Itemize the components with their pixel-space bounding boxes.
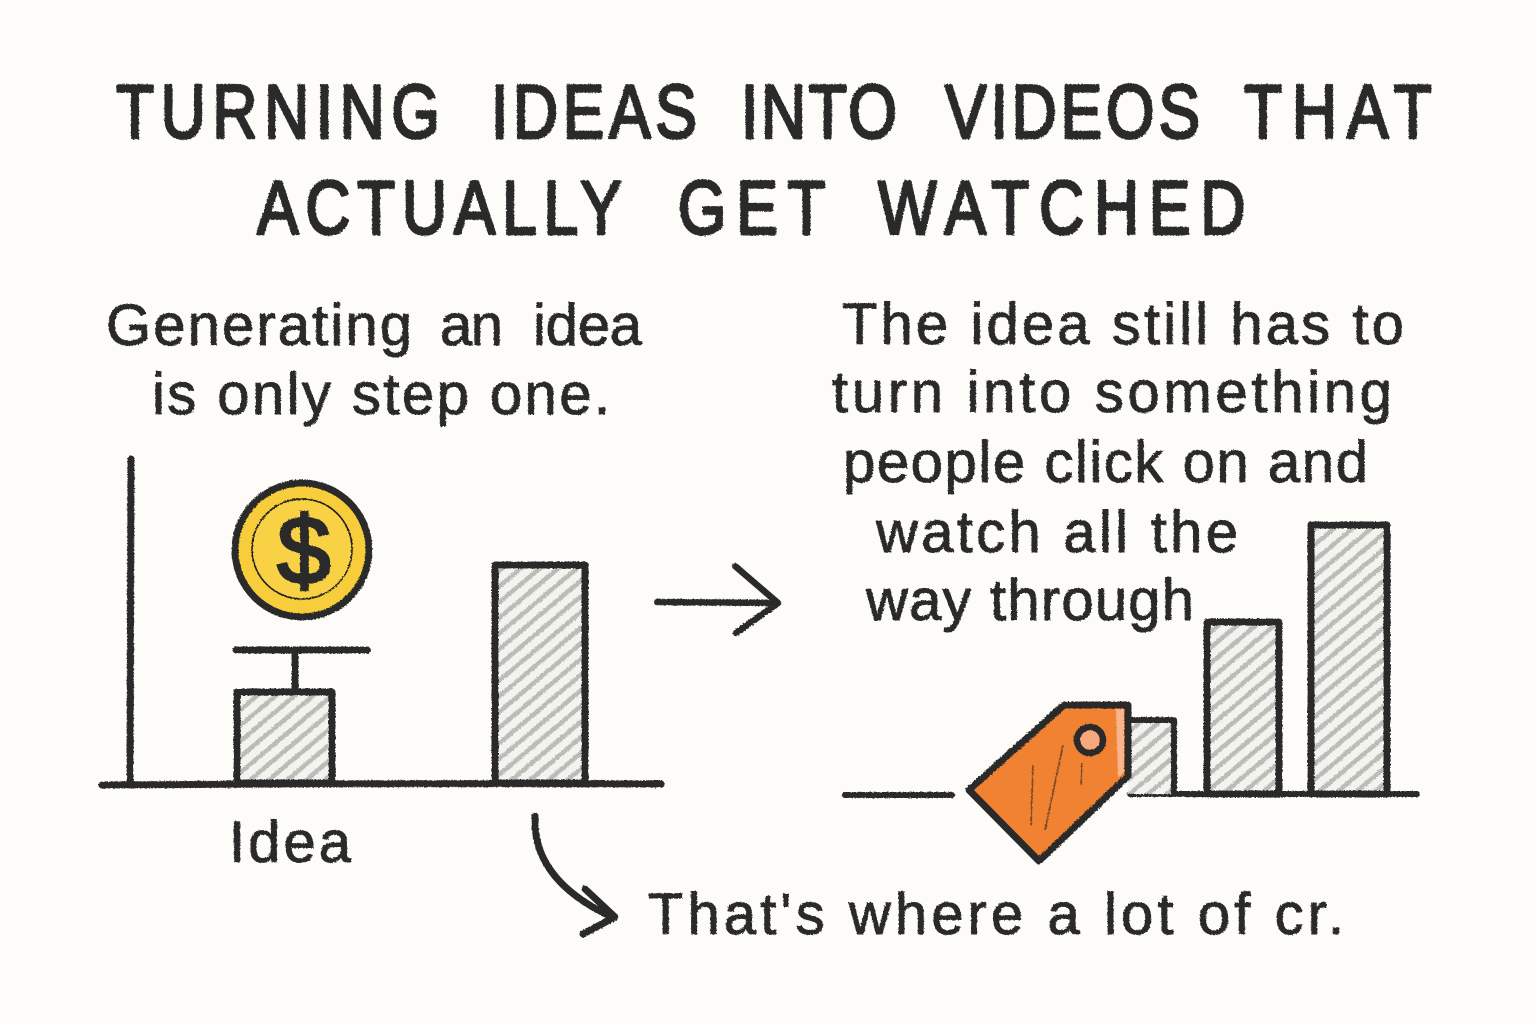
- title: THAT: [1244, 69, 1432, 154]
- title: VIDEOS: [945, 69, 1200, 154]
- bar: tall: [1311, 525, 1387, 794]
- text block: right statement: watch all the: [875, 500, 1238, 565]
- bar: tall: [495, 565, 585, 783]
- title: WATCHED: [878, 165, 1245, 250]
- text block: right statement: turn into something: [832, 360, 1392, 425]
- label: idea: Idea: [229, 810, 352, 875]
- title: TURNING: [116, 69, 440, 154]
- bar: small: [1128, 720, 1174, 794]
- bar: medium: [1207, 622, 1279, 794]
- arrow: curved down to caption: [535, 816, 615, 934]
- text block: left statement: an: [440, 293, 503, 358]
- icon: dollar coin: [235, 483, 369, 617]
- text block: right statement: [832, 292, 1404, 633]
- right bar chart: [845, 525, 1417, 861]
- chart baseline: [845, 794, 1417, 795]
- left bar chart: [102, 459, 661, 875]
- text block: right statement: way through: [865, 568, 1194, 633]
- text block: left statement: is only step one.: [152, 362, 610, 427]
- text block: right statement: The idea still has to: [842, 292, 1404, 357]
- caption: That's where a lot of cr.: [648, 882, 1344, 947]
- title: IDEAS: [491, 69, 697, 154]
- icon: orange price tag: [969, 705, 1128, 861]
- title: INTO: [741, 69, 897, 154]
- bar: idea: [237, 692, 332, 783]
- title: [116, 69, 1432, 250]
- icon: dollar coin: $: [277, 497, 331, 604]
- text block: left statement: idea: [533, 293, 643, 358]
- icon: balance stand: [236, 650, 367, 690]
- text block: left statement: Generating: [106, 293, 412, 358]
- title: GET: [678, 165, 826, 250]
- title: ACTUALLY: [257, 165, 622, 250]
- text block: right statement: people click on and: [843, 430, 1368, 495]
- arrow: right: [657, 566, 778, 633]
- chart axes: [102, 459, 661, 785]
- text block: left statement: [106, 293, 643, 427]
